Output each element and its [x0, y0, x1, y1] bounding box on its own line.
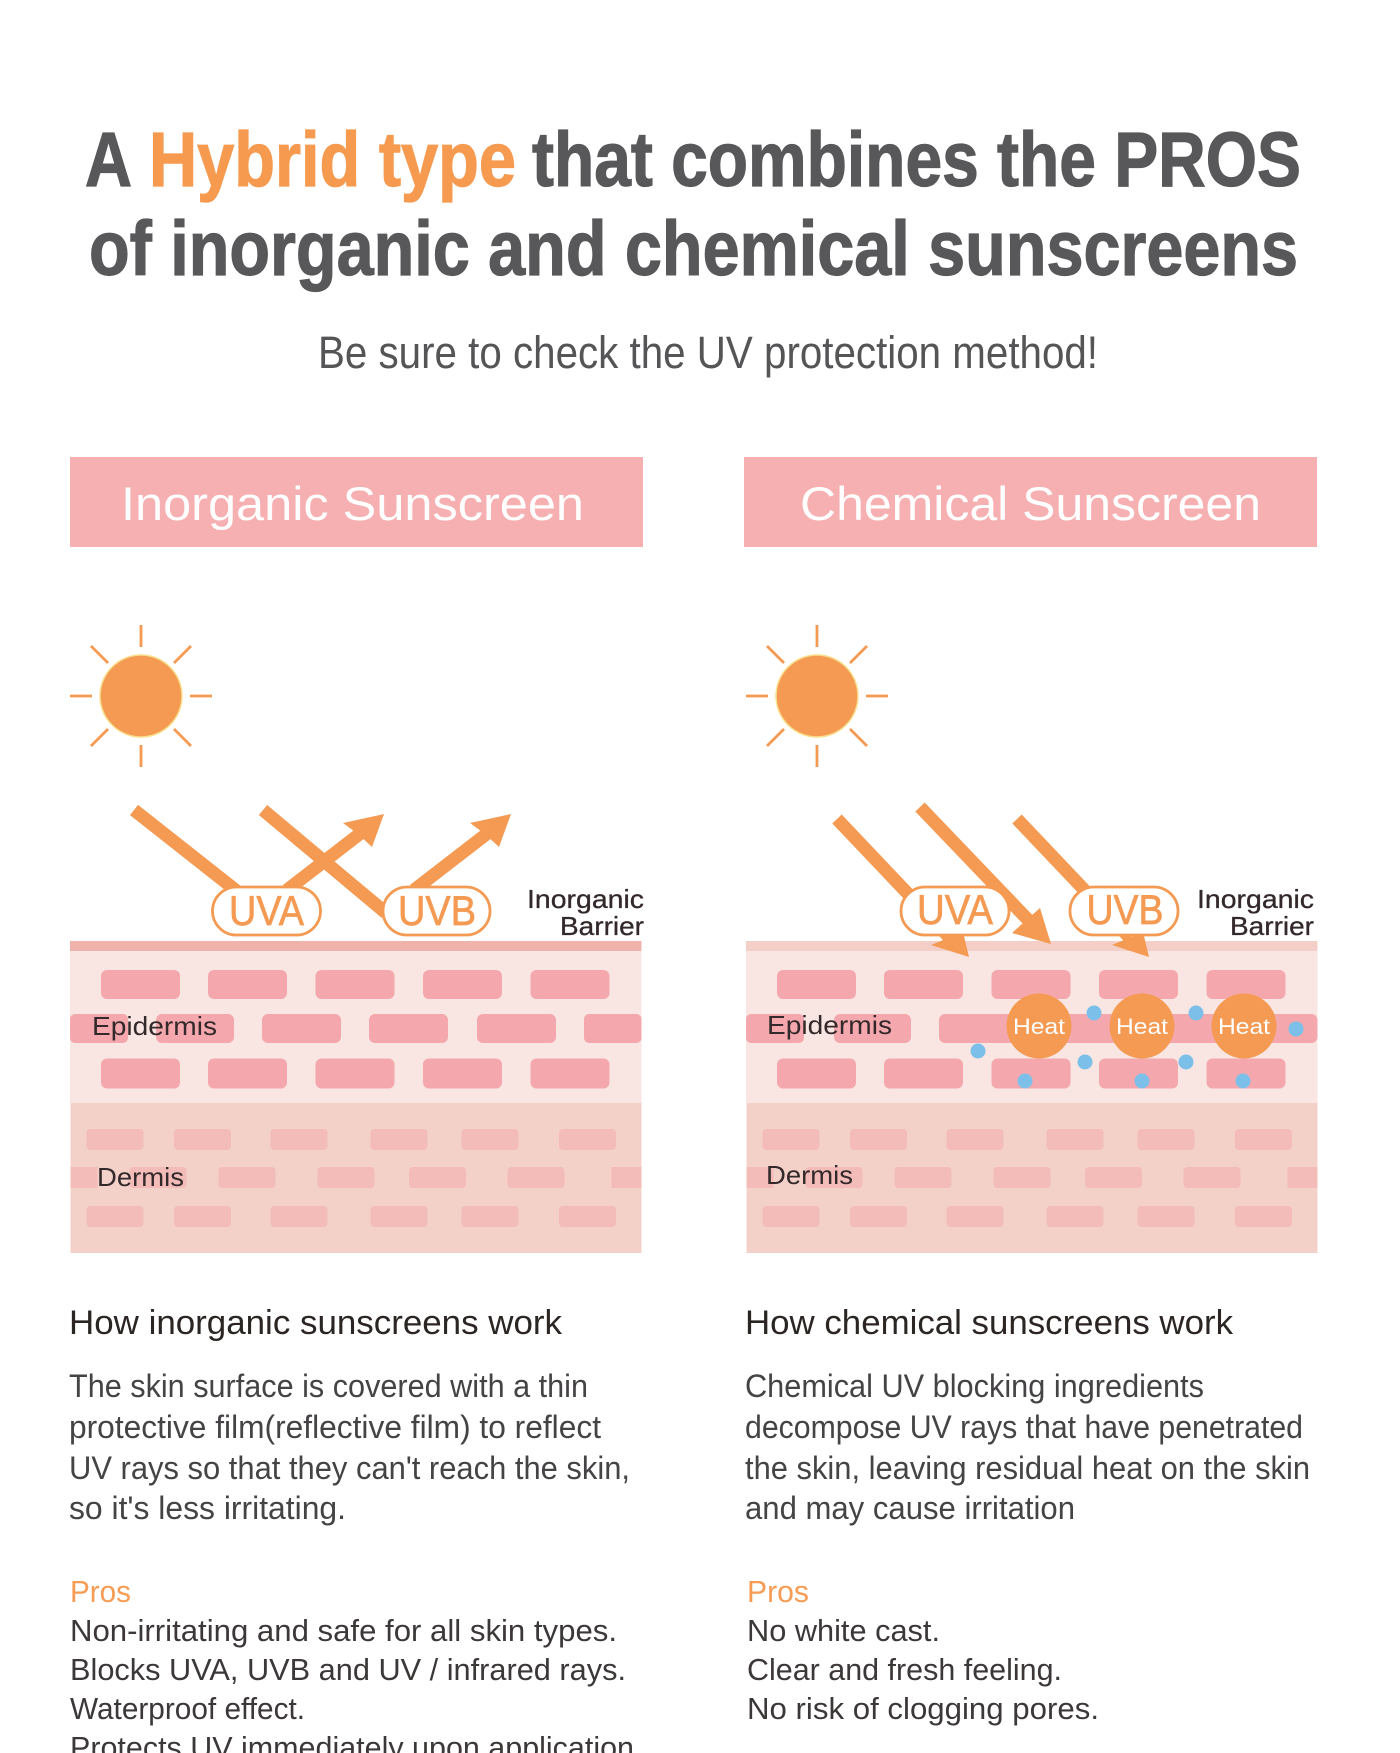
label: dermis: Dermis [766, 1160, 853, 1190]
text: chemical description: decompose UV rays that have penetrated [745, 1409, 1303, 1445]
icon: sun [746, 625, 888, 767]
text: inorganic pros: Pros [70, 1574, 131, 1609]
text: chemical pros: No white cast. [747, 1613, 940, 1648]
subtitle: Be sure to check the UV protection method! [318, 327, 1098, 378]
text: chemical description [745, 1368, 1310, 1526]
label: inorganic barrier [527, 884, 644, 941]
arrows: UV rays penetrating [837, 807, 1130, 938]
blue particles [970, 1006, 1304, 1088]
text: inorganic description: The skin surface is covered with a thin [69, 1368, 588, 1404]
text: inorganic pros: Waterproof effect. [70, 1691, 305, 1726]
label: epidermis: Epidermis [767, 1010, 892, 1040]
title: Hybrid type [149, 117, 516, 203]
text: chemical description: Chemical UV blocking ingredients [745, 1368, 1204, 1404]
text: chemical description: the skin, leaving residual heat on the skin [745, 1450, 1310, 1486]
text: chemical pros: Pros [747, 1574, 809, 1609]
text: chemical pros: No risk of clogging pores. [747, 1691, 1099, 1726]
heat circles: Heat [1013, 1014, 1065, 1039]
heat circles: Heat [1218, 1014, 1270, 1039]
icon: sun [70, 625, 212, 767]
text: inorganic description: protective film(reflective film) to reflect [69, 1409, 601, 1445]
label: inorganic barrier: Inorganic [527, 884, 644, 914]
label: epidermis: Epidermis [92, 1011, 217, 1041]
heading: how chemical sunscreens work: How chemical sunscreens work [745, 1304, 1234, 1342]
panel heading: inorganic sunscreen [70, 457, 643, 547]
label: UVA: UVA [917, 886, 993, 933]
text: chemical pros: Clear and fresh feeling. [747, 1652, 1062, 1687]
diagram: chemical sunscreen [746, 625, 1318, 1253]
text: inorganic pros: Blocks UVA, UVB and UV / infrared rays. [70, 1652, 626, 1687]
text: inorganic pros: Non-irritating and safe for all skin types. [70, 1613, 617, 1648]
panel heading: chemical sunscreen [744, 457, 1317, 547]
label: inorganic barrier: Barrier [560, 911, 644, 941]
text: chemical description: and may cause irritation [745, 1490, 1075, 1526]
skin: dermis layer [70, 1103, 642, 1253]
text: chemical pros [747, 1574, 1099, 1726]
label: inorganic barrier: Barrier [1230, 911, 1314, 941]
heat circles: Heat [1116, 1014, 1168, 1039]
title [85, 117, 1301, 292]
label: UVB: UVB [398, 887, 476, 934]
skin: epidermis layer [746, 941, 1318, 1103]
panel heading: inorganic sunscreen: Inorganic Sunscreen [121, 477, 584, 530]
label: UVB: UVB [1086, 886, 1164, 933]
skin: epidermis layer [70, 941, 642, 1103]
title: A [85, 117, 132, 203]
label: UVA: UVA [229, 887, 304, 934]
skin: dermis layer [746, 1103, 1318, 1253]
diagram: inorganic sunscreen [70, 625, 644, 1253]
arrows: UV rays reflected [134, 810, 511, 913]
label: inorganic barrier: Inorganic [1197, 884, 1314, 914]
text: inorganic pros [70, 1574, 634, 1753]
heat circles [1006, 994, 1276, 1058]
text: inorganic description: UV rays so that they can't reach the skin, [69, 1450, 630, 1486]
label: dermis: Dermis [97, 1162, 184, 1192]
label: inorganic barrier [1197, 884, 1314, 941]
heading: how inorganic sunscreens work: How inorganic sunscreens work [69, 1304, 563, 1342]
text: inorganic description [69, 1368, 630, 1526]
panel heading: chemical sunscreen: Chemical Sunscreen [800, 477, 1261, 530]
text: inorganic description: so it's less irritating. [69, 1490, 346, 1526]
arrow heads over skin [931, 908, 1149, 957]
